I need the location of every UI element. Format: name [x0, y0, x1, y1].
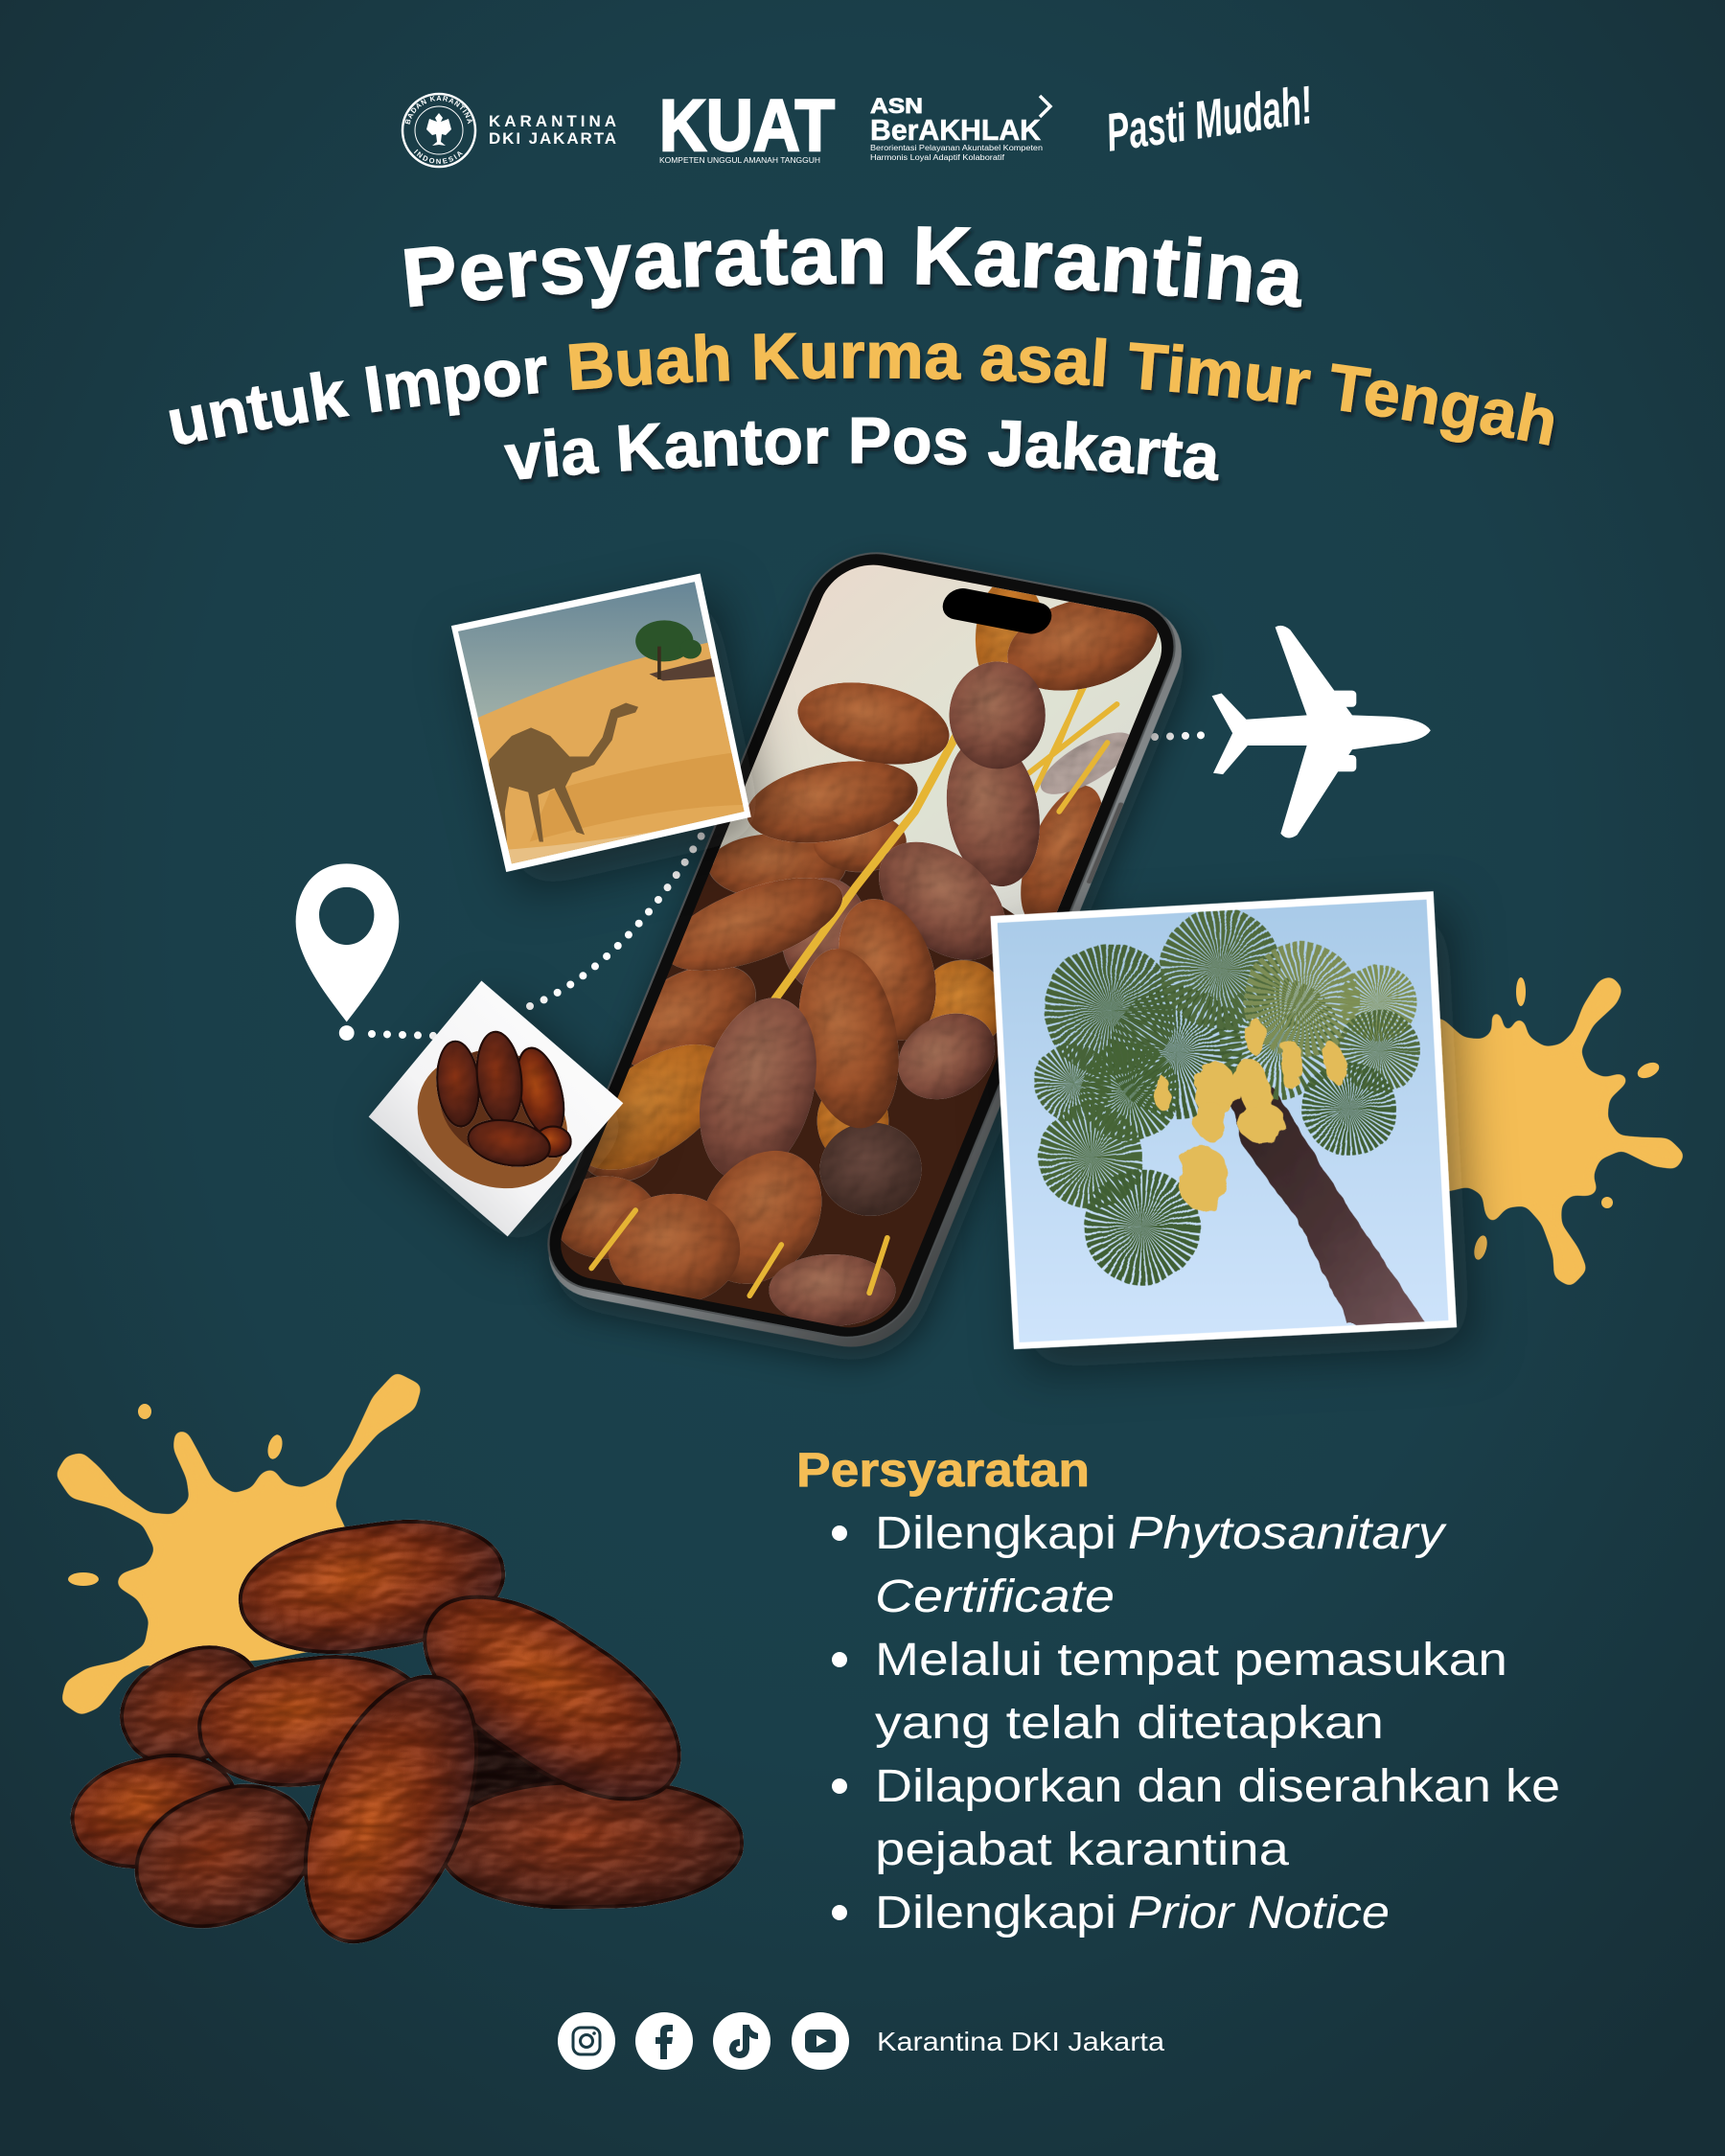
icon: instagram — [558, 2012, 615, 2070]
date stems — [770, 688, 1119, 998]
palm fronds — [1054, 938, 1399, 1256]
requirements section — [796, 1443, 1560, 1938]
palm scene — [997, 899, 1449, 1342]
back dates — [578, 578, 1141, 1181]
splash: right — [1399, 976, 1685, 1287]
logo: Karantina DKI Jakarta: INDONESIA — [414, 149, 463, 164]
logo: Karantina DKI Jakarta: KARANTINA — [489, 112, 616, 130]
phone body — [527, 543, 1201, 1357]
requirement 1: Certificate — [875, 1571, 1115, 1622]
requirement 4 — [832, 1888, 1390, 1938]
requirement 3: pejabat karantina — [875, 1824, 1289, 1875]
icon: facebook — [635, 2012, 693, 2070]
logo: Pasti Mudah!: Pasti Mudah! — [1102, 74, 1316, 163]
logo: KUAT: KOMPETEN UNGGUL AMANAH TANGGUH — [659, 156, 820, 165]
requirement 2 — [832, 1635, 1507, 1749]
requirement 3: Dilaporkan dan diserahkan ke — [875, 1761, 1560, 1812]
phone screen photo: dates — [522, 537, 1210, 1362]
logo: Karantina DKI Jakarta: BADAN KARANTINA — [404, 96, 472, 125]
requirement 1: Phytosanitary — [1128, 1508, 1447, 1559]
requirement 4: Prior Notice — [1128, 1888, 1390, 1938]
footer social row — [558, 2012, 1164, 2070]
splash: left — [56, 1372, 422, 1715]
camel — [487, 702, 638, 853]
requirement 2: yang telah ditetapkan — [875, 1698, 1384, 1749]
icon: tiktok — [713, 2012, 770, 2070]
requirement 1 — [832, 1508, 1447, 1622]
logo: ASN BerAKHLAK: ASN — [870, 94, 923, 118]
logo row — [401, 74, 1316, 169]
requirement 2: Melalui tempat pemasukan — [875, 1635, 1507, 1686]
title line 2: untuk Impor Buah Kurma asal Timur Tengah — [169, 333, 1556, 450]
photo: pile of dates — [62, 1507, 743, 1966]
camel scene — [458, 582, 744, 864]
dates in bowl — [434, 1029, 572, 1172]
logo: ASN BerAKHLAK — [870, 94, 1050, 162]
title line 3: via Kantor Pos Jakarta — [504, 418, 1222, 486]
front dates — [553, 582, 1168, 1326]
footer account name: Karantina DKI Jakarta — [877, 2027, 1164, 2056]
photo: date palm — [983, 887, 1465, 1355]
logo: ASN BerAKHLAK: BerAKHLAK — [870, 113, 1042, 147]
icon: location pin — [296, 863, 399, 1041]
requirement 1: Dilengkapi — [875, 1508, 1116, 1559]
palm flowers — [1154, 1020, 1350, 1212]
dotted route lines — [372, 735, 1209, 1036]
photo: camel in desert — [440, 564, 756, 881]
logo: Karantina DKI Jakarta — [401, 92, 616, 169]
heading: Persyaratan: Persyaratan — [796, 1443, 1090, 1497]
logo: ASN BerAKHLAK: Berorientasi Pelayanan Akuntabel Kompeten — [870, 144, 1043, 152]
icon: youtube — [792, 2012, 849, 2070]
title line 1: Persyaratan Karantina — [404, 226, 1305, 314]
photo: dates in bowl — [369, 980, 623, 1236]
title — [169, 226, 1556, 486]
logo: KUAT: KUAT — [659, 85, 835, 167]
plane — [1212, 626, 1431, 838]
requirement 3 — [832, 1761, 1560, 1875]
phone notch — [937, 585, 1057, 636]
palm trunk — [1225, 1080, 1428, 1327]
logo: ASN BerAKHLAK: Harmonis Loyal Adaptif Kolaboratif — [870, 153, 1005, 162]
logo: Karantina DKI Jakarta: DKI JAKARTA — [489, 129, 616, 148]
wooden bowl — [418, 1067, 567, 1188]
requirement 4: Dilengkapi — [875, 1888, 1116, 1938]
phone — [522, 537, 1210, 1362]
